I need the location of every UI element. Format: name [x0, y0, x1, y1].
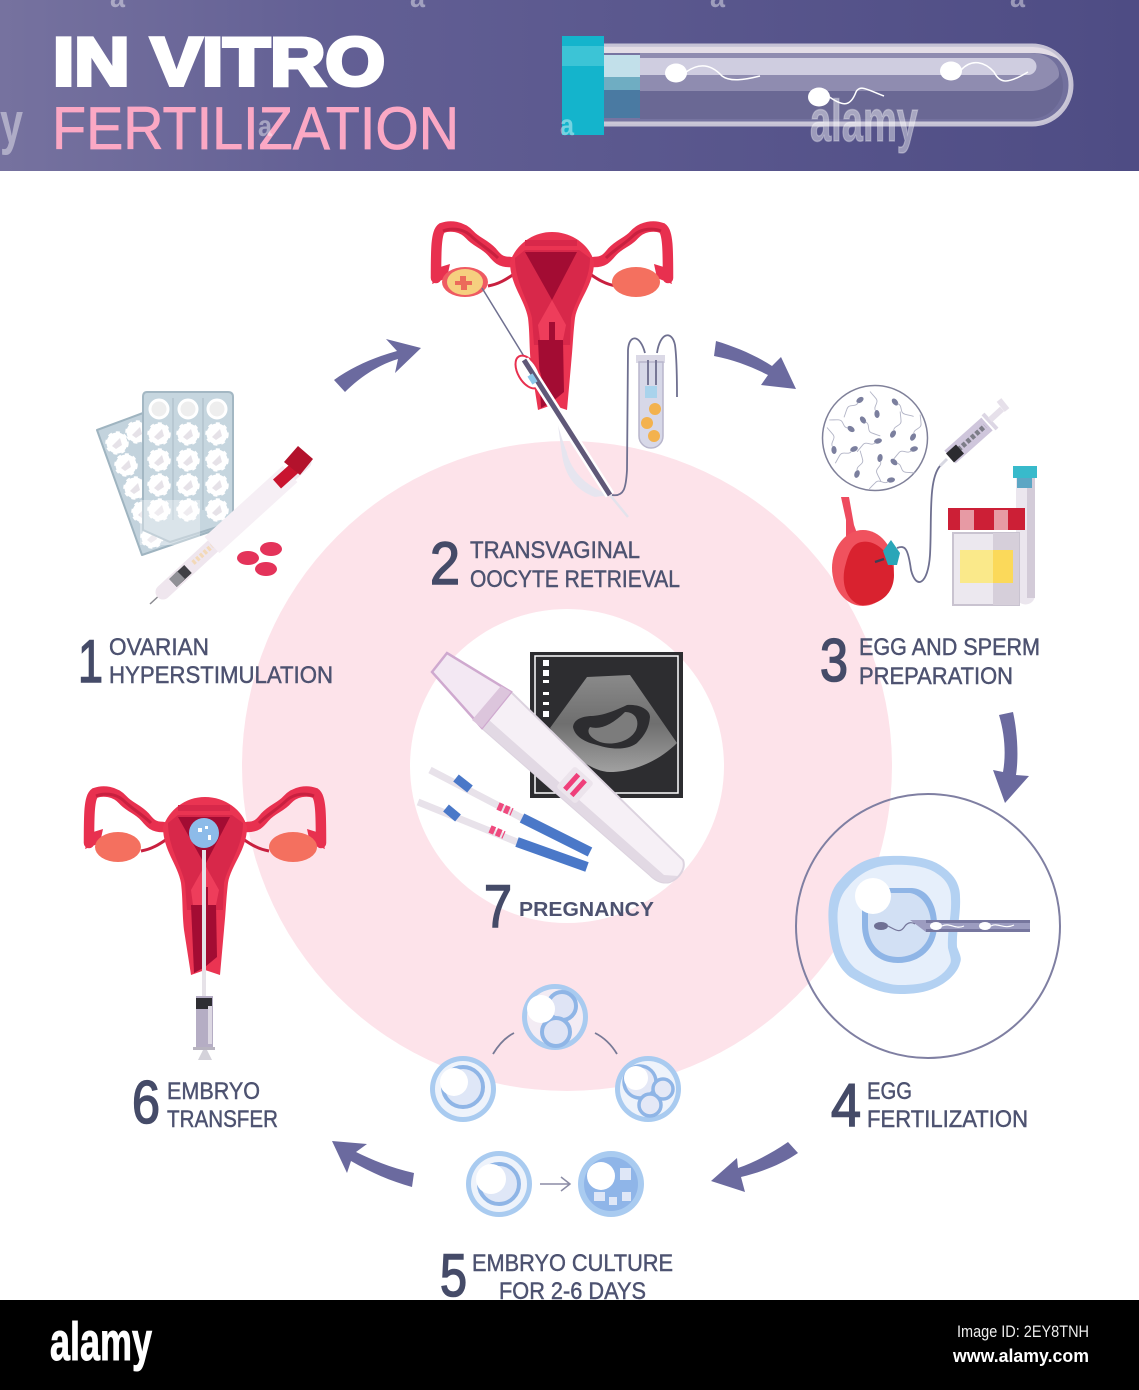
icon: pregnancy test pen: [432, 653, 684, 883]
label: step 7: [484, 873, 655, 940]
title: fertilization: FERTILIZATION: [52, 95, 459, 162]
label: step 5: 5: [440, 1242, 467, 1309]
icon: back blister pack: [97, 413, 215, 555]
icon: front blister pack: [140, 392, 233, 545]
label: step 7: PREGNANCY: [519, 899, 655, 921]
footer bar: [0, 1300, 1139, 1390]
label: step 3: [820, 627, 1040, 694]
watermarks in header: a: [560, 109, 574, 142]
watermarks in header: a: [258, 110, 272, 143]
arrow: step 5 to 6: [332, 1141, 414, 1187]
label: step 3: 3: [820, 627, 848, 694]
arrow: step 4 to 5: [711, 1142, 798, 1192]
icon: wire: [897, 466, 940, 582]
step 3: egg and sperm preparation illustration: [822, 386, 1037, 606]
icon: ultrasound scan: [530, 652, 683, 798]
icon: early embryo: [466, 1151, 532, 1217]
label: step 5: EMBRYO CULTURE: [472, 1250, 673, 1277]
icon: needle probe: [482, 288, 628, 517]
arrow: small grey: [540, 1177, 570, 1191]
step 6: embryo transfer illustration: [85, 791, 325, 1060]
label: step 6: TRANSFER: [167, 1106, 278, 1133]
step 5: embryo culture illustration: [430, 984, 681, 1217]
arrow: step 1 to 2: [334, 339, 421, 392]
footer url: www.alamy.com: [952, 1346, 1089, 1366]
icon: specimen jar: [948, 508, 1025, 605]
title: in vitro: IN VITRO: [53, 24, 385, 100]
icon: egg cell: [828, 856, 961, 994]
icon: sperm petri dish: [822, 386, 928, 490]
icon: test strips: [418, 770, 590, 867]
label: step 4: FERTILIZATION: [867, 1106, 1028, 1133]
label: step 6: [132, 1069, 278, 1136]
label: step 1: 1: [78, 628, 103, 695]
label: step 2: TRANSVAGINAL: [470, 537, 640, 564]
label: step 3: PREPARATION: [859, 663, 1013, 690]
step 4: egg fertilization illustration: [796, 794, 1060, 1058]
icon: magnifier circle: [796, 794, 1060, 1058]
step 7: pregnancy illustration: [418, 652, 684, 883]
pink ring: [242, 441, 892, 1091]
label: step 4: [831, 1072, 1028, 1139]
label: step 6: EMBRYO: [167, 1078, 260, 1105]
watermarks in header: [0, 0, 1025, 156]
icon: syringe: [940, 400, 1007, 466]
step 1: ovarian hyperstimulation illustration: [97, 392, 313, 604]
icon: arcs: [493, 1033, 617, 1054]
watermarks in header: alamy: [810, 89, 918, 154]
icon: test tube with sperm: [562, 36, 1071, 135]
step 2: oocyte retrieval illustration: [432, 226, 677, 517]
icon: single-cell embryo: [430, 1056, 496, 1122]
icon: uterus with ovaries: [432, 226, 672, 410]
label: step 3: EGG AND SPERM: [859, 634, 1040, 661]
icon: embryo in uterus: [189, 818, 219, 848]
label: step 1: HYPERSTIMULATION: [109, 662, 333, 689]
icon: specimen tube: [1013, 466, 1037, 604]
label: step 5: [440, 1242, 673, 1309]
icon: transfer syringe: [193, 996, 215, 1060]
icon: blastocyst: [578, 1151, 644, 1217]
label: step 2: OOCYTE RETRIEVAL: [470, 566, 680, 593]
icon: egg test tube: [636, 355, 665, 448]
watermarks in header: y: [0, 91, 23, 156]
arrow: step 2 to 3: [714, 341, 796, 389]
icon: three-cell embryo: [522, 984, 588, 1050]
label: step 2: 2: [430, 530, 460, 597]
icon: pipette with sperm: [874, 920, 1030, 932]
icon: four-cell embryo: [615, 1056, 681, 1122]
footer image id: Image ID: 2EY8TNH: [957, 1322, 1089, 1341]
label: step 7: 7: [484, 873, 512, 940]
label: step 5: FOR 2-6 DAYS: [499, 1278, 646, 1305]
label: step 6: 6: [132, 1069, 160, 1136]
label: step 2: [430, 530, 680, 597]
label: step 1: [78, 628, 333, 695]
label: step 4: 4: [831, 1072, 861, 1139]
icon: uterus with embryo: [85, 791, 325, 975]
arrow: step 3 to 4: [993, 712, 1029, 803]
icon: testis: [832, 497, 900, 606]
header banner: [0, 0, 1139, 171]
label: step 1: OVARIAN: [109, 634, 209, 661]
footer logo: alamy: [50, 1312, 152, 1372]
icon: wire to test tube: [612, 335, 677, 495]
label: step 4: EGG: [867, 1078, 912, 1105]
icon: injection pen: [150, 446, 313, 604]
icon: catheter: [202, 850, 206, 1000]
icon: red pills: [237, 542, 282, 576]
